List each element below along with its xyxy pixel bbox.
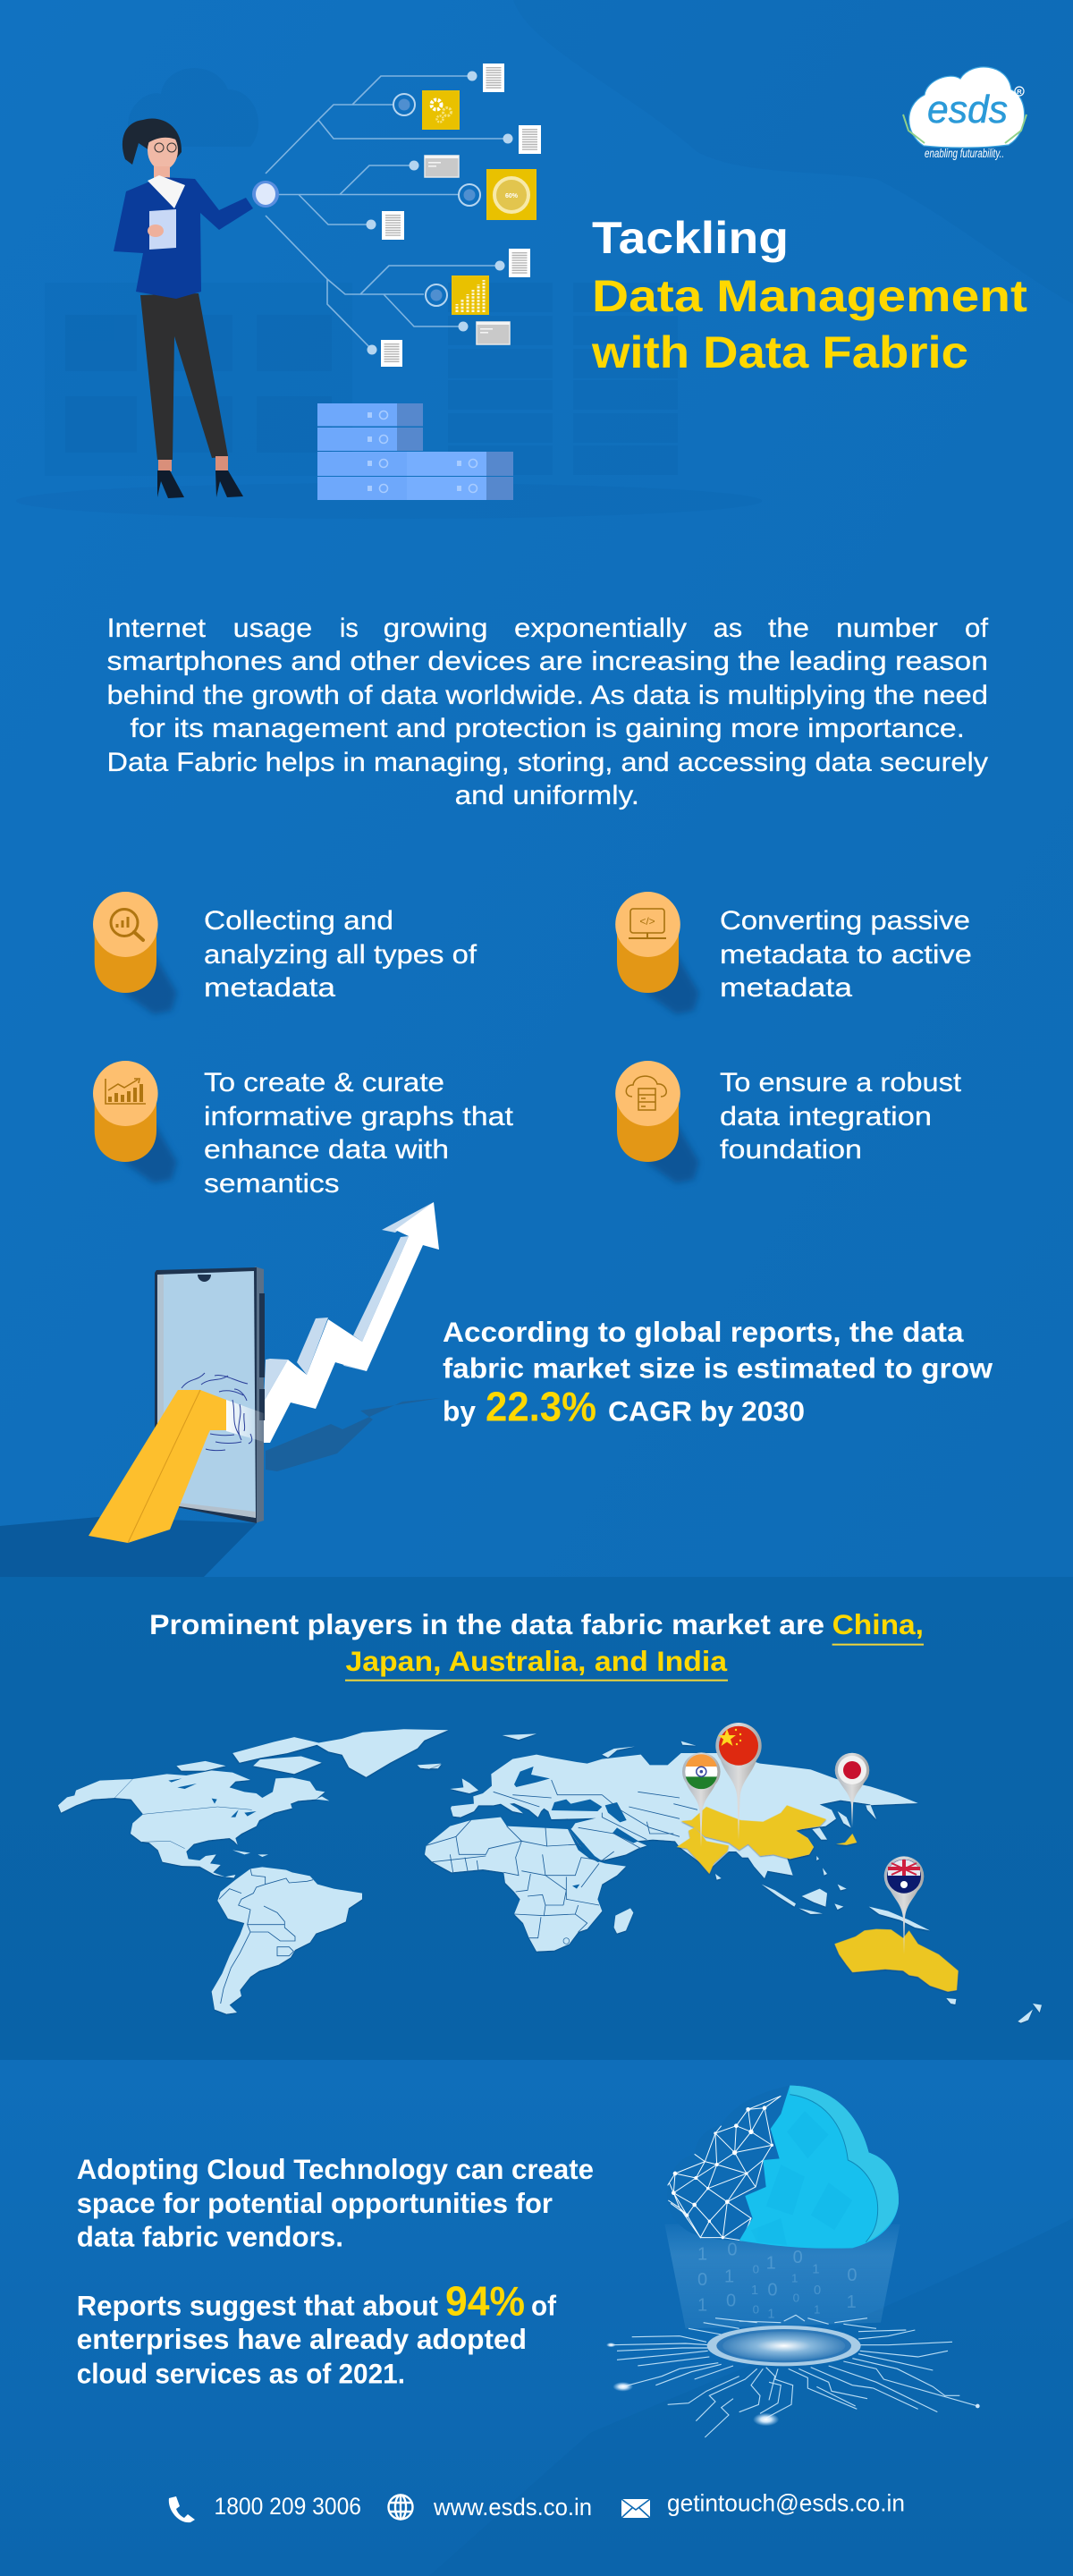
- map heading: Prominent players in the data fabric market are: [149, 1608, 824, 1640]
- text: graphs: enhance data with: [204, 1135, 449, 1165]
- hero illustration: yellow gauge panel: [486, 169, 536, 220]
- map: africa, eurasia and oceania: [418, 1733, 1042, 2023]
- binary digits: 1: [791, 2272, 798, 2285]
- cloud section text: enterprises have already adopted: [77, 2323, 527, 2355]
- illustration: data cloud on circuit: [606, 2086, 980, 2437]
- binary digits: 1: [767, 2308, 774, 2322]
- intro paragraph: the: [768, 614, 809, 643]
- icon: cylinder with code monitor: </>: [639, 915, 655, 928]
- intro paragraph: behind the growth of data worldwide. As data is multiplying the need: [107, 681, 988, 710]
- stat: market growth: by: [443, 1395, 476, 1428]
- text: collecting: Collecting and: [204, 906, 393, 936]
- binary digits: 0: [753, 2263, 759, 2276]
- map: highlighted countries: [677, 1805, 959, 1992]
- hand shape: [89, 1390, 226, 1543]
- intro paragraph: for its management and protection is gaining more importance.: [131, 714, 965, 743]
- map: americas: [58, 1770, 362, 2014]
- text: collecting: metadata: [204, 973, 335, 1003]
- map: arctic and greenland: [176, 1729, 448, 1777]
- map heading: China,: [832, 1608, 924, 1640]
- stat: market growth: According to global reports, the data: [443, 1316, 964, 1348]
- intro paragraph: usage: [233, 614, 312, 643]
- icon: phone: [169, 2496, 195, 2522]
- stat value: 94%: [445, 2278, 525, 2325]
- title: [591, 213, 1027, 377]
- text: converting: Converting passive: [720, 906, 970, 936]
- stat: market growth: CAGR by 2030: [608, 1395, 805, 1428]
- footer contact: phone: [169, 2493, 361, 2522]
- hero illustration: yellow bars panel: [452, 275, 489, 315]
- pin: Australia: [884, 1856, 924, 1954]
- icon: cylinder with magnifier: [93, 892, 177, 1014]
- stat: market growth: [443, 1316, 993, 1430]
- binary digits: 1: [812, 2263, 819, 2277]
- cloud section text: cloud services as of 2021.: [77, 2357, 405, 2389]
- binary digits: 0: [767, 2281, 777, 2301]
- binary digits: 1: [766, 2254, 776, 2274]
- hero illustration: connection tree: [266, 76, 508, 350]
- binary digits: 0: [793, 2248, 803, 2267]
- hero illustration: woman: [114, 118, 253, 498]
- hero illustration: tree nodes: [367, 72, 513, 354]
- text: converting: metadata: [720, 973, 852, 1003]
- intro paragraph: as: [714, 614, 742, 643]
- binary digits: 0: [847, 2266, 857, 2285]
- cloud section text: Reports suggest that about: [77, 2290, 439, 2322]
- intro paragraph: [107, 614, 989, 810]
- arrow: [264, 1202, 439, 1443]
- text: integration: data integration: [720, 1102, 932, 1131]
- text: graphs: To create & curate: [204, 1068, 444, 1097]
- hero illustration: faint backdrop: [16, 68, 762, 519]
- central disc: [707, 2326, 861, 2366]
- feature 2: active metadata: [615, 892, 972, 1014]
- light beam: [664, 2224, 900, 2328]
- floor shadow: [0, 1517, 257, 1577]
- title: with Data Fabric: [591, 327, 968, 377]
- intro paragraph: smartphones and other devices are increasing the leading reason: [107, 647, 988, 676]
- text: integration: [720, 1068, 962, 1165]
- icon: globe: [388, 2495, 413, 2520]
- cloud section text: space for potential opportunities for: [77, 2187, 553, 2219]
- binary digits: 1: [697, 2295, 707, 2315]
- background: upper right wave: [513, 0, 1073, 304]
- intro paragraph: and uniformly.: [455, 781, 639, 810]
- intro paragraph: is: [340, 614, 359, 643]
- cloud section text: Adopting Cloud Technology can create: [77, 2153, 594, 2185]
- text: converting: [720, 906, 972, 1003]
- feature 3: informative graphs: [93, 1061, 514, 1199]
- binary digits: 0: [727, 2241, 737, 2260]
- pin: Japan: [835, 1753, 869, 1827]
- background: map band: [0, 1577, 1073, 2060]
- binary digits: 1: [724, 2267, 734, 2287]
- icon: envelope: [621, 2499, 650, 2518]
- hero illustration: hub: [252, 181, 279, 208]
- intro paragraph: number: [836, 614, 938, 643]
- binary digits: 0: [793, 2291, 799, 2304]
- map heading: Japan, Australia, and India: [345, 1645, 728, 1677]
- text: graphs: informative graphs that: [204, 1102, 514, 1131]
- ripple lines: [182, 1373, 252, 1451]
- intro paragraph: Data Fabric helps in managing, storing, and accessing data securely: [107, 748, 988, 777]
- cloud section text: of: [531, 2290, 556, 2322]
- pin: India: [682, 1752, 721, 1847]
- binary digits: 0: [697, 2270, 707, 2290]
- map heading: [149, 1608, 924, 1681]
- circuit traces: [611, 2315, 977, 2437]
- text: collecting: analyzing all types of: [204, 940, 477, 970]
- world map: [58, 1729, 1042, 2023]
- glowing nodes: [606, 2343, 980, 2426]
- cloud solid half: [739, 2086, 899, 2249]
- text: converting: metadata to active: [720, 940, 972, 970]
- feature 1: metadata analysis: [93, 892, 477, 1014]
- hero illustration: yellow gear panel: [422, 90, 460, 130]
- text: graphs: [204, 1068, 514, 1199]
- intro paragraph: Internet: [107, 614, 207, 643]
- title: Tackling: [592, 213, 789, 263]
- intro paragraph: exponentially: [514, 614, 687, 643]
- background: upper section: [0, 0, 1073, 1577]
- text: integration: To ensure a robust: [720, 1068, 962, 1097]
- binary digits: 1: [847, 2292, 857, 2312]
- title: Data Management: [592, 271, 1027, 321]
- binary digits: [697, 2241, 857, 2322]
- footer contact: phone: 1800 209 3006: [215, 2493, 361, 2520]
- hero illustration: server stack: [317, 403, 513, 500]
- text: collecting: [204, 906, 477, 1003]
- binary digits: 1: [697, 2245, 707, 2265]
- icon: cylinder with code monitor: [615, 892, 699, 1014]
- binary digits: 0: [753, 2303, 759, 2317]
- logo: esds: [927, 88, 1008, 131]
- stat: market growth: fabric market size is estimated to grow: [443, 1352, 993, 1385]
- footer contact: email: getintouch@esds.co.in: [667, 2490, 905, 2517]
- icon: cylinder with cloud server: [615, 1061, 699, 1183]
- hero illustration: yellow gauge panel: 60%: [505, 193, 519, 199]
- intro paragraph: growing: [384, 614, 488, 643]
- cloud mesh half: [667, 2086, 790, 2241]
- phone: [155, 1267, 265, 1523]
- hero illustration: document cards: [381, 64, 541, 367]
- binary digits: 1: [814, 2303, 820, 2317]
- feature 4: data integration: [615, 1061, 962, 1183]
- logo: [903, 67, 1027, 160]
- icon: cylinder with growth chart: [93, 1061, 177, 1183]
- background: lower section: [0, 2060, 1073, 2576]
- footer contact: website: www.esds.co.in: [433, 2494, 592, 2521]
- logo: enabling futurability..: [925, 147, 1004, 160]
- binary digits: 1: [751, 2284, 758, 2298]
- arrow shadow: [266, 1398, 441, 1471]
- cloud section text: [77, 2153, 594, 2389]
- binary digits: 0: [726, 2291, 736, 2310]
- background: lower right wave: [429, 2218, 1073, 2576]
- cloud section text: data fabric vendors.: [77, 2221, 343, 2253]
- text: graphs: semantics: [204, 1169, 340, 1199]
- intro paragraph: of: [965, 614, 989, 643]
- illustration: phone with growth arrow: [0, 1202, 441, 1577]
- stat value: 22.3%: [486, 1384, 596, 1430]
- logo: R: [1017, 88, 1022, 96]
- text: integration: foundation: [720, 1135, 862, 1165]
- binary digits: 0: [814, 2284, 821, 2298]
- pin: China: [715, 1723, 762, 1840]
